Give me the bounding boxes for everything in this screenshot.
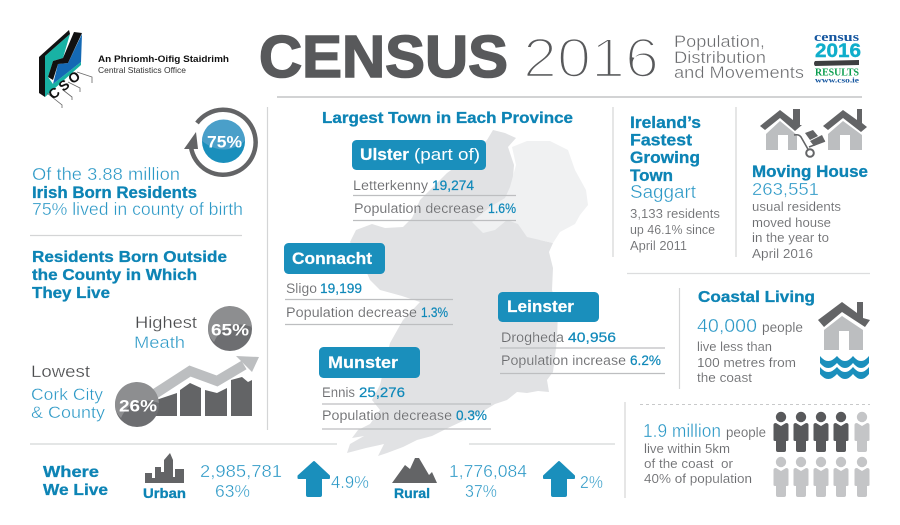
panel: Connacht: Connacht <box>292 249 372 268</box>
heading: residents born outside: They Live <box>32 285 110 302</box>
panel: fastest growing town: April 2011 <box>630 238 687 253</box>
lowest label <box>31 362 106 422</box>
stat: rural change: 2% <box>580 472 603 492</box>
census 2016 results badge <box>814 29 861 84</box>
title: CENSUS <box>259 24 508 90</box>
heading: where we live: We Live <box>43 482 108 499</box>
icon: urban skyline <box>143 453 186 501</box>
heading: residents born outside: the County in Which <box>32 267 197 284</box>
panel: Munster: 25,276 <box>359 385 405 400</box>
panel: Connacht <box>284 243 453 324</box>
panel: Munster: 0.3% <box>456 408 487 423</box>
lowest label: & County <box>31 403 106 422</box>
panel: moving house text: moved house <box>752 215 831 230</box>
subtitle: and Movements <box>674 64 804 82</box>
icon: 75% circular arrow <box>184 110 256 175</box>
panel: within 5km of coast: of the coast or <box>644 456 734 471</box>
panel: Leinster: 6.2% <box>630 353 661 368</box>
panel: within 5km of coast <box>643 421 766 486</box>
arrow: urban increase <box>298 462 329 496</box>
panel: coastal living: 100 metres from <box>697 355 796 370</box>
arrow: rural increase <box>544 462 574 496</box>
census 2016 results badge: census <box>814 29 859 44</box>
panel: fastest growing town: Town <box>630 167 673 185</box>
panel: Ulster: 1.6% <box>488 201 516 216</box>
panel: Connacht: Sligo <box>286 281 317 296</box>
stat: urban population <box>200 461 282 501</box>
panel: Munster: Ennis <box>322 385 355 400</box>
lowest label: Lowest <box>31 362 90 381</box>
icon: urban skyline: Urban <box>143 485 186 501</box>
panel: moving house text: 263,551 <box>752 179 819 199</box>
panel: moving house text <box>752 163 868 261</box>
icon: flooded house <box>818 302 870 379</box>
panel: fastest growing town: Fastest <box>630 132 693 150</box>
subtitle: Distribution <box>674 49 766 67</box>
heading: where we live <box>43 464 108 499</box>
text: Irish born residents: Irish Born Residents <box>32 184 197 202</box>
panel: Ulster: 19,274 <box>432 178 474 193</box>
panel: Ulster <box>352 140 516 220</box>
panel: coastal living: Coastal Living <box>698 289 815 306</box>
stat: rural population <box>449 461 527 501</box>
highest label: Meath <box>134 333 185 352</box>
logo: CSO: CSO <box>45 68 83 102</box>
panel: moving house text: April 2016 <box>752 246 813 261</box>
census 2016 results badge: RESULTS <box>815 68 859 78</box>
text: Irish born residents <box>32 164 243 219</box>
subtitle: Population, <box>674 33 765 51</box>
heading: residents born outside <box>32 249 227 302</box>
title: 2016 <box>523 26 659 89</box>
panel: Leinster: Leinster <box>507 297 574 316</box>
panel: within 5km of coast: live within 5km <box>644 441 730 456</box>
panel: moving house text: Moving House <box>752 163 868 181</box>
icon: rural mountains: Rural <box>394 485 430 501</box>
panel: moving house text: usual residents <box>752 199 841 214</box>
panel: Ulster: (part of) <box>414 145 480 164</box>
panel: coastal living: 40,000 <box>697 316 757 336</box>
panel: Munster: Munster <box>328 353 398 372</box>
panel: fastest growing town <box>630 114 720 253</box>
panel: coastal living: people <box>762 320 803 335</box>
census 2016 results badge: 2016 <box>815 41 861 62</box>
panel: Connacht: 19,199 <box>320 281 362 296</box>
panel: Ulster: Population decrease <box>354 201 484 216</box>
heading: residents born outside: Residents Born Outside <box>32 249 227 266</box>
logo: CSO: An Phriomh-Oifig Staidrimh <box>98 54 229 65</box>
panel: fastest growing town: up 46.1% since <box>630 222 715 237</box>
panel: coastal living: the coast <box>697 370 752 385</box>
icon: rural mountains <box>392 458 437 501</box>
icon: 75% circular arrow: 75% <box>207 132 242 152</box>
text: Irish born residents: 75% lived in county of birth <box>32 199 243 219</box>
panel: Leinster: Drogheda <box>501 330 565 345</box>
highest label: Highest <box>135 313 197 332</box>
panel: Munster <box>319 347 491 429</box>
heading: largest town: Largest Town in Each Province <box>322 110 573 127</box>
panel: moving house text: in the year to <box>752 230 829 245</box>
panel: within 5km of coast: people <box>726 425 766 440</box>
panel: within 5km of coast: 40% of population <box>644 471 752 486</box>
stat: urban change: 4.9% <box>331 472 369 492</box>
heading: where we live: Where <box>43 464 99 481</box>
panel: coastal living: live less than <box>697 339 772 354</box>
chart: rising bars and arrow <box>115 306 259 427</box>
panel: Connacht: 1.3% <box>421 305 448 320</box>
census 2016 results badge: www.cso.ie <box>815 76 859 84</box>
panel: fastest growing town: Saggart <box>630 182 696 202</box>
logo: CSO <box>39 30 229 108</box>
panel: Munster: Population decrease <box>322 408 452 423</box>
stat: rural population: 37% <box>465 481 497 501</box>
icon: moving house <box>760 109 867 157</box>
stat: urban population: 2,985,781 <box>200 461 282 481</box>
panel: Leinster: 40,956 <box>568 330 616 345</box>
chart: rising bars and arrow: 26% <box>119 398 157 416</box>
chart: rising bars and arrow: 65% <box>211 322 249 340</box>
panel: Leinster: Population increase <box>501 353 626 368</box>
lowest label: Cork City <box>31 385 104 404</box>
panel: coastal living <box>697 289 815 385</box>
text: Irish born residents: Of the 3.88 million <box>32 164 180 184</box>
stat: urban population: 63% <box>215 481 250 501</box>
title <box>259 24 659 90</box>
stat: rural population: 1,776,084 <box>449 461 527 481</box>
highest label <box>134 313 197 352</box>
logo: CSO: Central Statistics Office <box>98 65 186 75</box>
map of Ireland <box>347 130 588 456</box>
panel: fastest growing town: Ireland’s <box>630 114 701 132</box>
panel: fastest growing town: Growing <box>630 149 700 167</box>
icon: people pictogram, 40 percent highlighted <box>774 412 870 497</box>
panel: fastest growing town: 3,133 residents <box>630 206 720 221</box>
panel: Connacht: Population decrease <box>286 305 417 320</box>
panel: Ulster: Ulster <box>360 145 409 164</box>
panel: within 5km of coast: 1.9 million <box>643 421 721 441</box>
panel: Ulster: Letterkenny <box>353 178 428 193</box>
panel: Leinster <box>498 292 665 374</box>
subtitle <box>674 33 804 82</box>
